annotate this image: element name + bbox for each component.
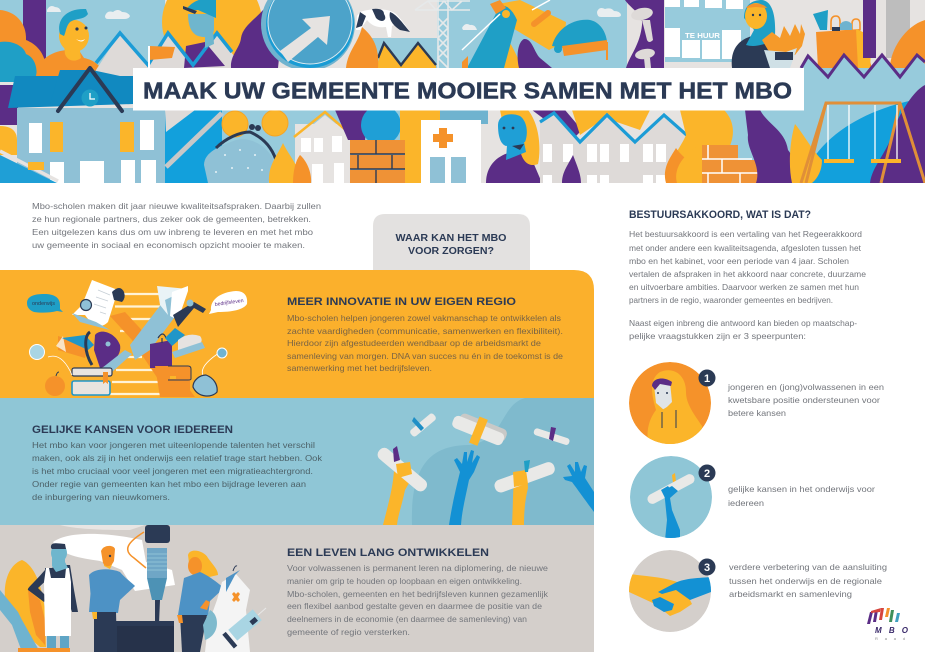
drill (116, 525, 174, 652)
heading and text: Voor volwassenen is permanent leren na diplomering, de nieuwe (287, 563, 548, 573)
header illustration (0, 0, 925, 183)
intro text (32, 201, 321, 250)
right column: bestuursakkoord: mbo en het kabinet, voor een periode van 4 jaar. Scholen (629, 256, 849, 266)
icon: hand with diploma (630, 456, 712, 540)
logo: MBO Raad: Raad (875, 636, 905, 641)
right bars and zigzag roof (801, 0, 925, 80)
building with for rent sign (665, 0, 750, 62)
woman with headscarf and flowers (732, 0, 805, 68)
title banner: MAAK UW GEMEENTE MOOIER SAMEN MET HET MBO (143, 78, 792, 104)
medical coat and syringe (203, 566, 266, 652)
playground with swing and trees (745, 85, 925, 183)
callout: waar kan het mbo voor zorgen: VOOR ZORGEN? (408, 246, 494, 257)
text 2 (728, 484, 875, 508)
text 2: iedereen (728, 498, 764, 508)
text 3: verdere verbetering van de aansluiting (729, 562, 887, 572)
heading and text: samenwerking met het bedrijfsleven. (287, 363, 432, 373)
man with beard (89, 546, 135, 652)
diagonal road (165, 110, 222, 183)
text 3: arbeidsmarkt en samenleving (729, 589, 852, 599)
number badge 2: 2 (704, 468, 710, 480)
text 3 (729, 562, 887, 599)
woman with blue face (486, 110, 542, 183)
speech bubble: bedrijfsleven: bedrijfsleven (214, 298, 244, 308)
logo: MBO Raad (867, 608, 909, 641)
shopping bag (813, 10, 872, 68)
intro text: Mbo-scholen maken dit jaar nieuwe kwaliteitsafspraken. Daarbij zullen (32, 201, 321, 211)
traffic sign with arrow (261, 0, 355, 71)
right column: bestuursakkoord: en uitvoerbare ambities. Daarvoor werken ze samen met hun (629, 282, 859, 292)
number badge 3: 3 (704, 562, 710, 574)
heading and text: samenleving van morgen. DNA van succes nu én in de toekomst is de (287, 351, 563, 361)
yellow backdrop and hospital (400, 110, 488, 183)
number badge 1 (698, 370, 716, 386)
woman with long hair (177, 551, 224, 652)
heading and text: Onder regie van gemeenten kan het mbo een bijdrage leveren aan (32, 479, 306, 489)
heading and text (287, 547, 549, 637)
title banner (133, 68, 804, 110)
brick wall (335, 110, 405, 183)
text 3: tussen het onderwijs en de regionale (729, 576, 882, 586)
icon: young person in hoodie (629, 362, 711, 444)
lower left house with clock (0, 68, 165, 183)
heading and text: Mbo-scholen helpen jongeren zowel vakmanschap te ontwikkelen als (287, 313, 561, 323)
heading and text (287, 296, 563, 373)
crane (415, 0, 470, 68)
right column: bestuursakkoord: pelijke vraagstukken zijn er 3 speerpunten: (629, 331, 806, 341)
speerpunt 2 (630, 456, 875, 540)
logo: MBO Raad: MBO (875, 626, 909, 635)
right column: bestuursakkoord: Naast eigen inbreng die antwoord kan bieden op maatschap- (629, 318, 857, 328)
yellow hands with diplomas (375, 445, 556, 525)
text 1: jongeren en (jong)volwassenen in een (727, 382, 884, 392)
intro text: uw gemeente in sociaal en economisch opzicht mooier te maken. (32, 240, 305, 250)
excavator (462, 0, 621, 68)
right column: bestuursakkoord: partners in de regio, waaronder gemeentes en bedrijven. (629, 295, 833, 305)
callout: waar kan het mbo voor zorgen: WAAR KAN HET MBO (396, 233, 507, 244)
orange tree, cow, and farm (346, 9, 437, 68)
heading and text: Het mbo kan voor jongeren met uiteenlopende talenten het verschil (32, 440, 315, 450)
illustration: raised hands with diplomas (375, 398, 594, 525)
left scene: man, tree and roof (0, 0, 130, 82)
number badge 3 (698, 558, 716, 576)
panel: een leven lang ontwikkelen (0, 525, 594, 652)
blue hands (449, 450, 594, 525)
right column: bestuursakkoord: BESTUURSAKKOORD, WAT IS DAT? (629, 209, 811, 221)
yellow circle with worker (96, 0, 262, 80)
speech bubble: bedrijfsleven (209, 291, 247, 314)
coins and purse (204, 110, 288, 183)
heading and text: EEN LEVEN LANG ONTWIKKELEN (287, 547, 489, 559)
speerpunt 3 (629, 550, 887, 632)
panel: gelijke kansen (0, 398, 594, 525)
grey apartment block with zigzag roof (532, 110, 690, 183)
text 1: betere kansen (728, 408, 786, 418)
chef (0, 543, 78, 652)
heading and text: de inburgering van nieuwkomers. (32, 492, 170, 502)
text 1: kwetsbare positie ondersteunen voor (728, 395, 880, 405)
building with for rent sign: TE HUUR (685, 33, 720, 40)
heading and text: GELIJKE KANSEN VOOR IEDEREEN (32, 424, 233, 436)
heading and text: zachte vaardigheden (communicatie, samenwerken en flexibiliteit). (287, 326, 563, 336)
heading and text: maken, ook als zij in het onderwijs een relatief trage start hebben. Ook (32, 453, 323, 463)
intro text: Een uitgelezen kans dus om uw inbreng te leveren en met het mbo (32, 227, 313, 237)
right column: bestuursakkoord: vertalen de afspraken in het akkoord naar concrete, duurzame (629, 269, 866, 279)
right column: bestuursakkoord: met onder andere een kwaliteitsagenda, afgesloten tussen het (629, 243, 862, 253)
nails on purple band (625, 0, 664, 68)
scrolls in the air (409, 412, 570, 447)
text 2: gelijke kansen in het onderwijs voor (728, 484, 875, 494)
purple plant (230, 10, 279, 68)
right column: bestuursakkoord: Het bestuursakkoord is een vertaling van het Regeerakkoord (629, 229, 862, 239)
heading and text: gemeente of regio versterken. (287, 627, 410, 637)
heading and text: MEER INNOVATIE IN UW EIGEN REGIO (287, 296, 516, 308)
heading and text: Hierdoor zijn afgestudeerden wendbaar op de arbeidsmarkt de (287, 338, 541, 348)
autumn trees and bricks (664, 110, 758, 183)
illustration: ladder with education objects (30, 280, 227, 397)
heading and text: deelnemers in de economie (en daarmee de samenleving) van (287, 614, 527, 624)
text 1 (727, 382, 884, 418)
heading and text (32, 424, 323, 502)
icon: handshake (629, 550, 711, 632)
callout: waar kan het mbo voor zorgen (373, 214, 530, 272)
number badge 1: 1 (704, 373, 710, 385)
right column: bestuursakkoord (629, 209, 866, 341)
intro text: ze hun regionale partners, dus zeker ook de gemeenten, betrekken. (32, 214, 311, 224)
small grey house with yellow tree (269, 112, 351, 183)
heading and text: een flexibel aanbod gestalte geven en daarmee de positie van de (287, 601, 542, 611)
heading and text: is het mbo cruciaal voor veel jongeren met een migratieachtergrond. (32, 466, 313, 476)
heading and text: manier om grip te houden op loopbaan en eigen ontwikkeling. (287, 576, 522, 586)
panel: meer innovatie (0, 270, 594, 398)
number badge 2 (698, 464, 716, 482)
speech bubble: onderwijs (27, 294, 63, 313)
speerpunt 1 (629, 362, 884, 444)
heading and text: Mbo-scholen, gemeenten en het bedrijfsleven kunnen gezamenlijk (287, 589, 549, 599)
speech bubble: onderwijs: onderwijs (32, 301, 55, 307)
illustration: professionals and drill (0, 525, 266, 652)
